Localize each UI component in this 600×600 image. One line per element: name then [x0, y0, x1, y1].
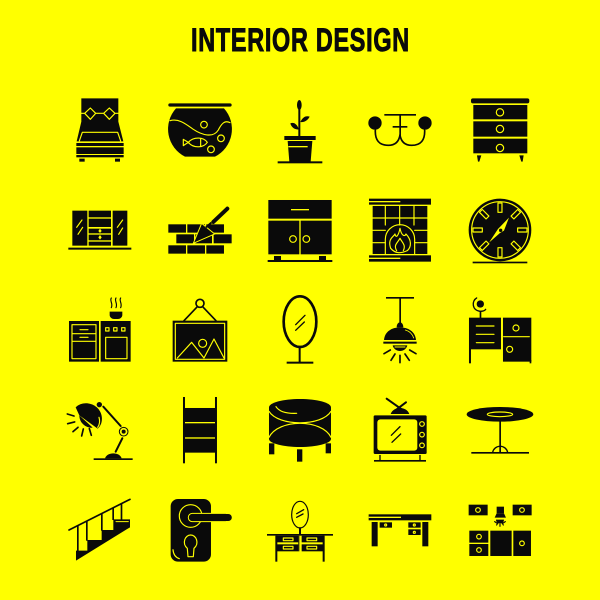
icon: dressing table with mirror [267, 501, 333, 562]
icon: chest of drawers [471, 98, 529, 162]
icon: pendant lamp [383, 297, 417, 363]
icon: fish bowl [168, 103, 232, 157]
icon: kitchen counter with cup [69, 298, 131, 362]
icon: wall clock [469, 199, 531, 263]
icon: fitted kitchen [469, 505, 532, 556]
icon: round table [467, 407, 533, 454]
icon: bed [76, 98, 124, 162]
icon: desk lamp [67, 402, 133, 460]
icon: bricks and trowel [168, 209, 232, 254]
icon: writing desk [369, 514, 431, 546]
icon: wardrobe [68, 211, 131, 250]
icon: standing mirror [284, 296, 316, 364]
icon: wall chandelier [368, 114, 432, 145]
icon: round pouf [269, 399, 331, 462]
title: INTERIOR DESIGN [191, 21, 409, 58]
icon: sideboard cabinet [268, 200, 332, 262]
icon: desk with lamp [469, 298, 531, 363]
icon: ladder shelf [183, 397, 217, 463]
icon: hanging picture [173, 299, 227, 362]
icon: potted plant [278, 100, 322, 163]
icon: door handle [171, 499, 232, 562]
icon: staircase [69, 499, 130, 561]
icon: fireplace [369, 199, 431, 262]
icon: retro television [374, 399, 427, 462]
